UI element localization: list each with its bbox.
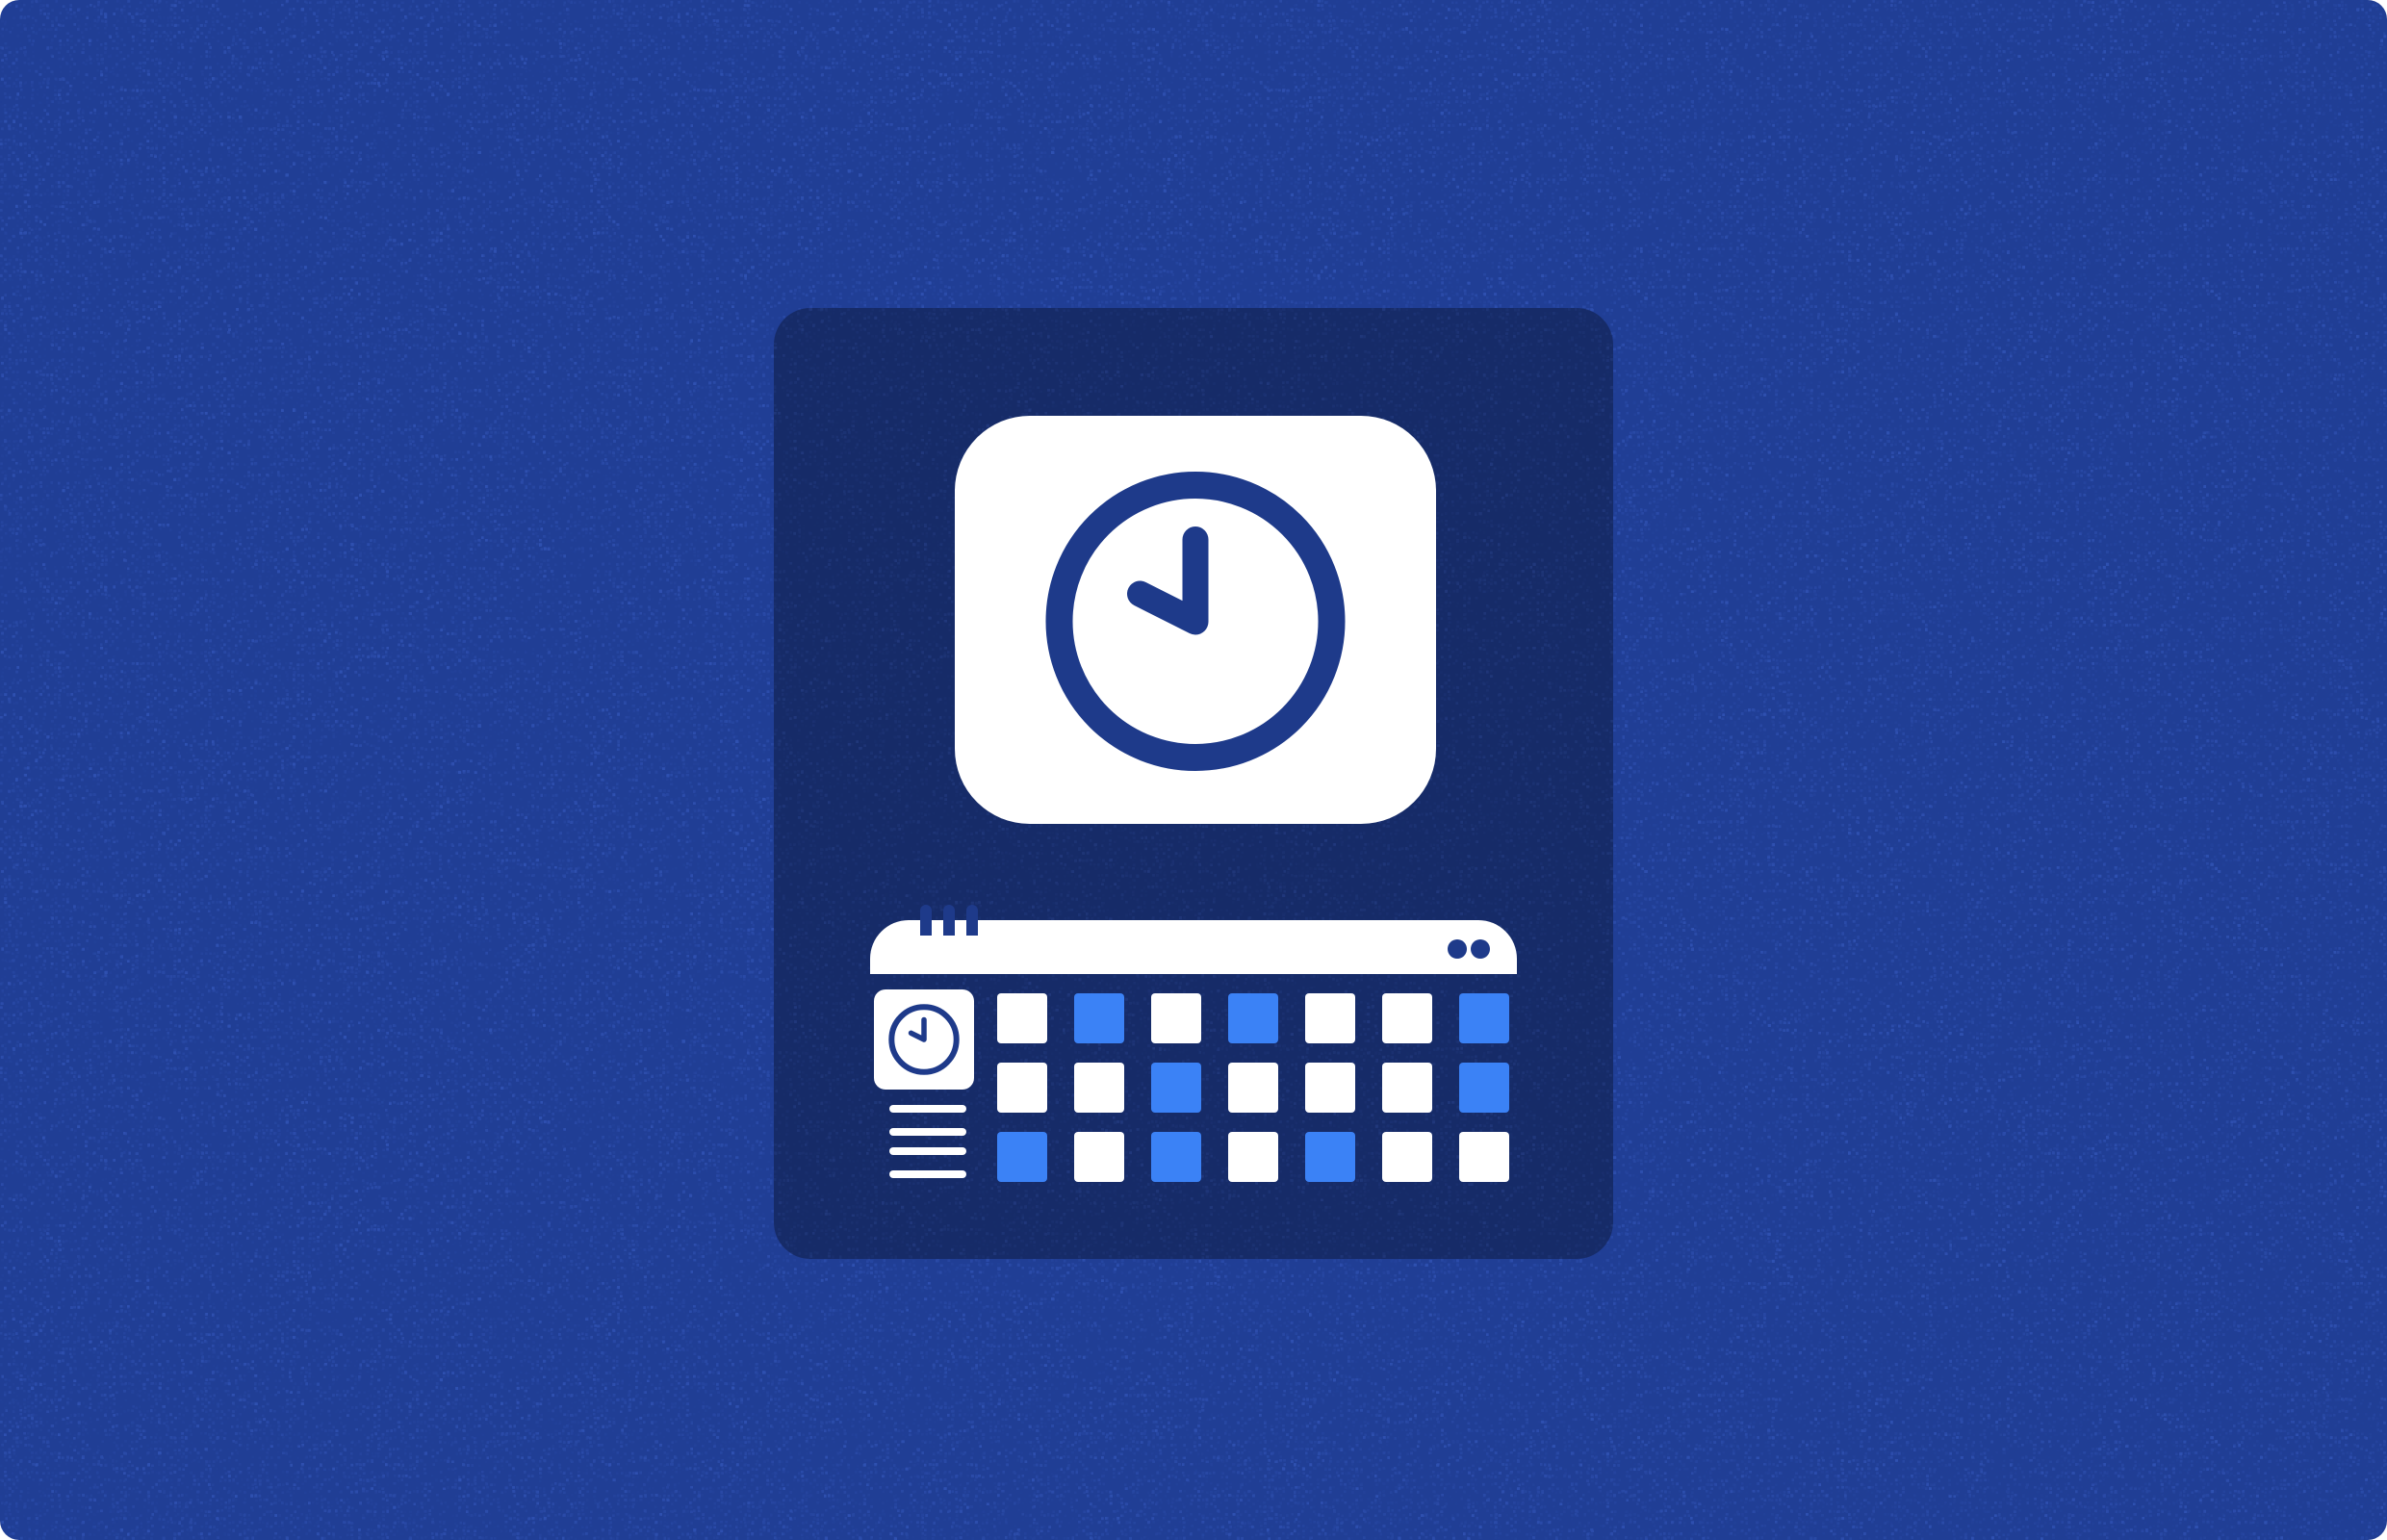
text lines under small clock	[889, 1105, 966, 1178]
small clock tile	[874, 989, 974, 1090]
calendar header bar	[870, 920, 1517, 974]
calendar day grid	[997, 993, 1509, 1182]
panel: dark illustration card	[774, 308, 1613, 1259]
clock face ring	[1059, 485, 1332, 757]
icon: large clock tile	[955, 416, 1436, 824]
clock tile background	[955, 416, 1436, 824]
header dots	[1448, 939, 1490, 959]
calendar binding rings	[920, 905, 978, 936]
clock hands	[1140, 539, 1195, 622]
calendar	[870, 905, 1517, 1182]
